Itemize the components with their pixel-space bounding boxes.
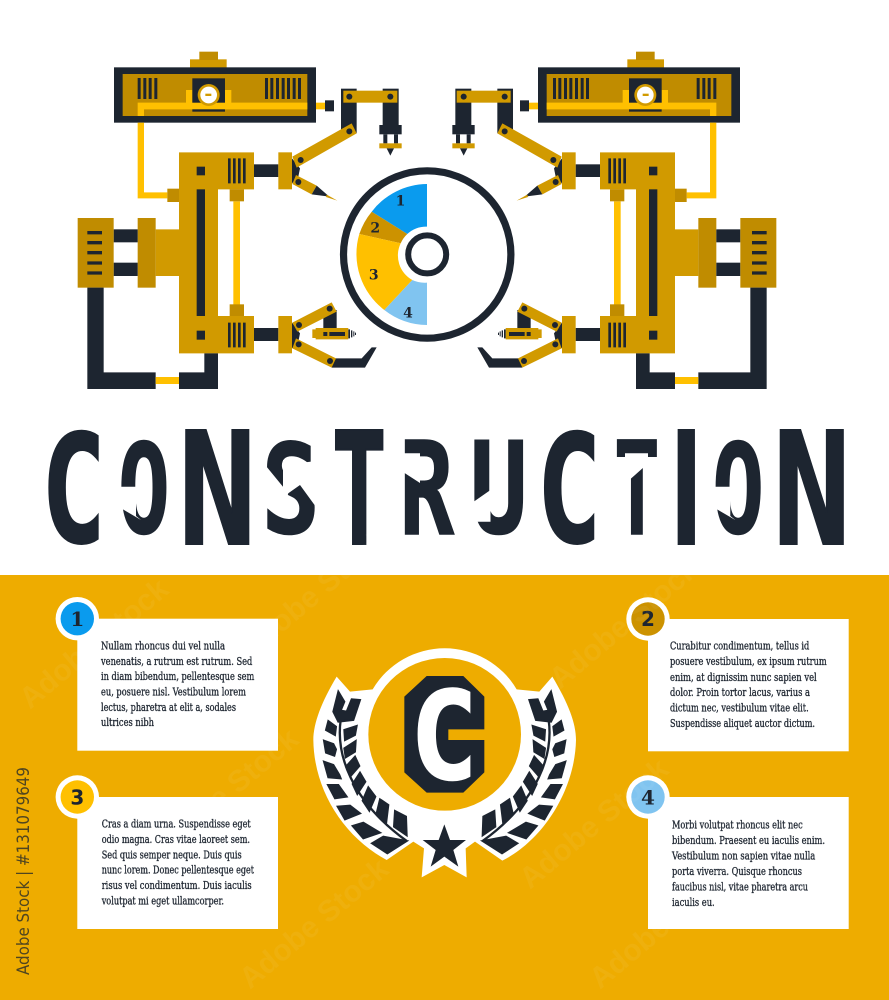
white wreath backing <box>313 648 576 877</box>
segment 4 <box>384 280 427 325</box>
watermark: Adobe Stock <box>513 752 675 895</box>
watermark: Adobe Stock <box>233 852 395 995</box>
title CONSTRUCTION: C <box>537 403 602 578</box>
card 1 text: in diam bibendum, pellentesque sem <box>101 670 255 683</box>
card 3 text: nunc lorem. Donec pellentesque eget <box>102 864 254 876</box>
orange medallion <box>368 658 521 811</box>
title CONSTRUCTION: O <box>712 419 764 563</box>
title CONSTRUCTION: N <box>773 399 851 581</box>
card 2 text: Suspendisse aliquet auctor dictum. <box>670 717 815 730</box>
left robot machine <box>78 52 402 389</box>
watermark: Adobe Stock <box>143 722 305 865</box>
title CONSTRUCTION: O <box>118 419 170 563</box>
watermark <box>13 522 745 995</box>
lower robot arm with gripper <box>254 302 377 368</box>
title CONSTRUCTION <box>41 397 851 583</box>
disc hub <box>408 235 446 273</box>
title CONSTRUCTION: S <box>262 419 320 563</box>
badge 3: 3 <box>70 785 84 809</box>
title CONSTRUCTION: C <box>41 403 106 578</box>
card 2 <box>626 597 849 751</box>
segment numbers <box>369 194 413 322</box>
yellow cable from control box to body <box>138 123 167 198</box>
watermark: Adobe Stock <box>13 572 175 715</box>
card 3 text: odio magna. Cras vitae laoreet sem. <box>102 833 250 846</box>
card 4 <box>626 775 849 929</box>
badge 1: 1 <box>70 607 84 631</box>
badge 3 <box>56 775 99 819</box>
top control box <box>114 52 316 123</box>
card 3 text <box>101 818 254 908</box>
card 4 text: bibendum. Praesent eu iaculis enim. <box>672 834 825 847</box>
orange lower panel <box>0 575 889 1000</box>
card 2 text <box>670 640 827 730</box>
badge 2: 2 <box>641 607 655 631</box>
letter C: C <box>410 666 478 808</box>
card 1 text: ultrices nibh <box>101 716 155 729</box>
card 1 text <box>100 640 255 729</box>
segment 3 <box>356 234 412 310</box>
left laurel <box>324 692 407 853</box>
card 3 text: Cras a diam urna. Suspendisse eget <box>102 818 251 830</box>
central disc chart <box>344 171 511 338</box>
octagonal plate <box>404 676 484 793</box>
segment 1 <box>372 184 427 234</box>
title CONSTRUCTION: I <box>669 397 703 583</box>
card 4 text <box>671 818 825 909</box>
title CONSTRUCTION: N <box>178 399 256 581</box>
card 1 text: venenatis, a rutrum est rutrum. Sed <box>100 655 253 668</box>
segment numbers: 2 <box>370 220 380 236</box>
card 4 text: porta viverra. Quisque rhoncus <box>672 865 802 878</box>
segment numbers: 4 <box>403 306 413 322</box>
card 4 text: iaculis eu. <box>672 896 715 909</box>
card 3 <box>56 775 278 929</box>
card 2 text: enim, at dignissim nunc sapien vel <box>670 671 817 684</box>
watermark: Adobe Stock <box>583 852 745 995</box>
segment 2 <box>359 212 407 243</box>
watermark: Adobe Stock <box>543 552 705 695</box>
card 2 text: Curabitur condimentum, tellus id <box>670 640 810 652</box>
badge 2 <box>626 597 670 641</box>
card 2 text: posuere vestibulum, ex ipsum rutrum <box>670 655 827 668</box>
title CONSTRUCTION: T <box>614 415 660 564</box>
star <box>423 824 466 867</box>
card 3 text: volutpat mi eget ullamcorper. <box>101 894 224 908</box>
card 1 text: eu, posuere nisl. Vestibulum lorem <box>101 686 247 698</box>
main body <box>156 152 254 353</box>
disc outer ring <box>344 171 511 338</box>
card 3 text: Sed quis semper neque. Duis quis <box>102 848 242 862</box>
card 1 <box>56 597 278 751</box>
right laurel <box>483 692 565 853</box>
card 1 text: Nullam rhoncus dui vel nulla <box>101 640 225 652</box>
title CONSTRUCTION: U <box>470 416 527 563</box>
side connector <box>316 100 334 111</box>
card 1 text: lectus, pharetra at elit a, sodales <box>101 701 236 714</box>
card 2 text: dolor. Proin tortor lacus, varius a <box>670 686 810 699</box>
card 4 text: Vestibulum non sapien vitae nulla <box>671 850 815 862</box>
badge 1 <box>56 597 99 640</box>
title CONSTRUCTION: R <box>400 416 455 565</box>
badge 4 <box>626 775 670 819</box>
card 4 text: faucibus nisl, vitae pharetra arcu <box>672 880 809 894</box>
card 2 text: dictum nec, vestibulum vitae elit. <box>670 702 809 714</box>
title CONSTRUCTION: T <box>332 400 387 582</box>
rear block with pistons <box>78 218 156 288</box>
badge 4: 4 <box>641 785 655 809</box>
lower dark pipes <box>87 288 218 389</box>
emblem <box>313 648 576 877</box>
segment numbers: 1 <box>396 194 405 210</box>
stock credit: Adobe Stock | #131079649 <box>14 767 34 975</box>
right robot machine (mirror of left) <box>452 52 776 389</box>
card 4 text: Morbi volutpat rhoncus elit nec <box>672 818 803 832</box>
upper robot arm with pen tool <box>254 89 402 201</box>
watermark: Adobe Stock <box>233 522 395 665</box>
segment numbers: 3 <box>369 268 379 284</box>
card 3 text: risus vel condimentum. Duis iaculis <box>102 879 252 892</box>
